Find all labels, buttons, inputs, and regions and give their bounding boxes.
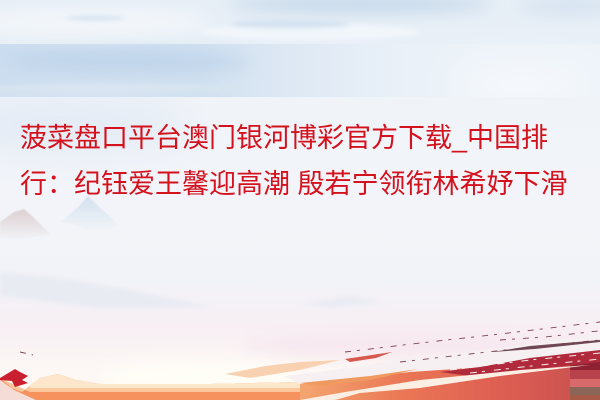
right edge mid band [570, 370, 600, 379]
glow highlight top [30, 374, 340, 388]
left sky tint [0, 101, 190, 149]
pale speckled brush area [285, 335, 600, 384]
lower sky [0, 97, 600, 400]
mountains [0, 196, 120, 238]
left pale corner [0, 380, 36, 400]
sky top band [0, 0, 600, 105]
title: 菠菜盘口平台澳门银河博彩官方下载_中国排 [20, 123, 548, 153]
white speckle over crimson [450, 353, 600, 373]
right edge pink band [570, 379, 600, 387]
red streak upper [345, 352, 392, 362]
orange streak lower [300, 369, 418, 386]
distant haze [0, 272, 600, 390]
title: 行：纪钰爱王馨迎高潮 殷若宁领衔林希妤下滑 [20, 162, 568, 201]
left red splash [0, 369, 28, 387]
pale streak across red [300, 365, 590, 400]
glow highlight upper [0, 374, 340, 392]
right red sweep [300, 356, 600, 400]
right edge top band [570, 360, 600, 370]
title [20, 123, 568, 201]
orange streak [225, 360, 340, 378]
brush speckle lines [20, 322, 600, 362]
right edge base band [570, 395, 600, 400]
crimson brush [440, 350, 600, 376]
dark brush streak [492, 340, 600, 352]
right edge brown band [570, 387, 600, 395]
left orange glow [0, 374, 340, 400]
